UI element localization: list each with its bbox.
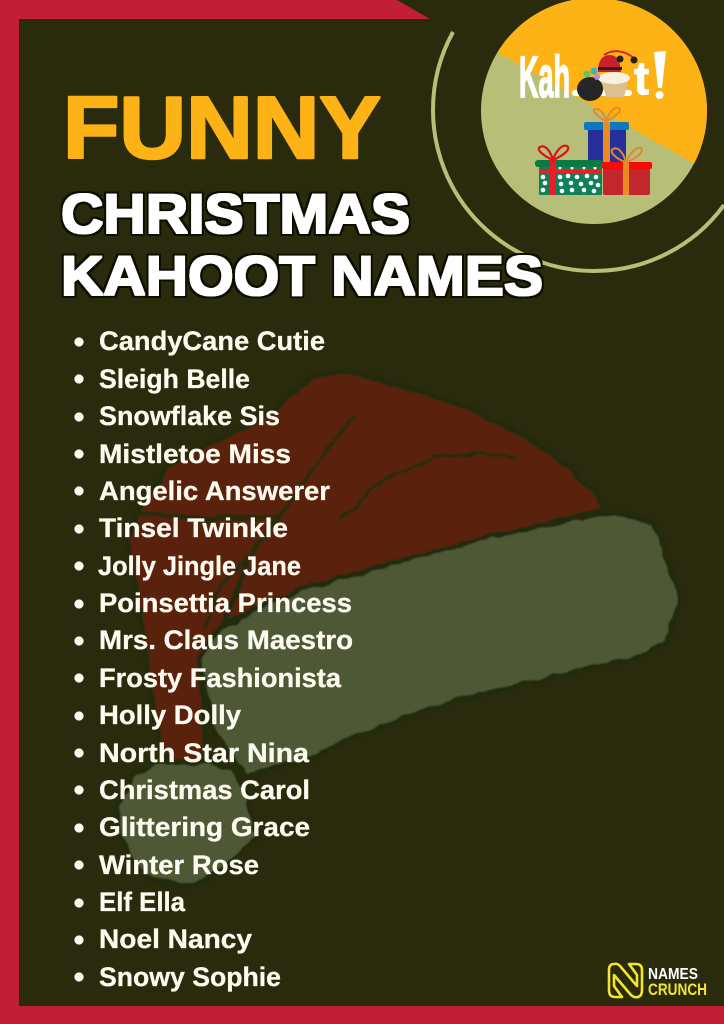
icon: red gift	[602, 148, 652, 195]
list: christmas kahoot names: Holly Dolly	[99, 700, 241, 730]
list: christmas kahoot names: Christmas Carol	[99, 775, 310, 805]
list: christmas kahoot names: CandyCane Cutie	[99, 326, 325, 356]
logo: names crunch	[609, 964, 707, 999]
logo: Kahoot wordmark: t	[634, 52, 649, 104]
list: christmas kahoot names: Angelic Answerer	[99, 476, 330, 506]
list: christmas kahoot names: Glittering Grace	[99, 812, 310, 842]
icon: blue gift	[584, 108, 629, 165]
list: christmas kahoot names: Sleigh Belle	[99, 364, 250, 394]
title: christmas kahoot names	[61, 182, 543, 307]
logo: names crunch: CRUNCH	[648, 981, 707, 999]
hat creases	[137, 417, 516, 627]
icon: cauldron	[577, 68, 603, 101]
list: christmas kahoot names: Winter Rose	[99, 850, 259, 880]
icon: santa hat basket	[598, 51, 638, 97]
list: christmas kahoot names: Elf Ella	[99, 887, 186, 917]
badge: kahoot circle	[481, 0, 707, 224]
list: christmas kahoot names: Snowflake Sis	[99, 401, 280, 431]
list: christmas kahoot names: Mrs. Claus Maestro	[99, 625, 353, 655]
list: christmas kahoot names: Frosty Fashionista	[99, 663, 342, 693]
illustration: faded santa hat	[117, 372, 679, 886]
list: christmas kahoot names: North Star Nina	[99, 738, 310, 768]
list: christmas kahoot names: Noel Nancy	[99, 924, 252, 954]
hat tail	[128, 420, 298, 768]
title: funny: FUNNY	[63, 78, 381, 177]
list: christmas kahoot names: Snowy Sophie	[99, 962, 281, 992]
logo: Kahoot wordmark: Kah	[519, 45, 570, 110]
icon: green polka gift	[535, 146, 603, 195]
logo: names crunch: NAMES	[648, 966, 698, 983]
list: christmas kahoot names: Mistletoe Miss	[99, 439, 291, 469]
title: christmas kahoot names: KAHOOT NAMES	[61, 244, 543, 307]
list: christmas kahoot names: Poinsettia Princess	[99, 588, 352, 618]
hat body	[137, 372, 606, 623]
hat pom-pom	[117, 762, 257, 886]
hat fur trim	[198, 512, 679, 775]
list: christmas kahoot names: Tinsel Twinkle	[99, 513, 288, 543]
list: christmas kahoot names	[74, 326, 353, 992]
decorative ring	[433, 32, 724, 271]
list: christmas kahoot names: Jolly Jingle Jane	[98, 551, 301, 581]
title: christmas kahoot names: CHRISTMAS	[61, 182, 410, 245]
